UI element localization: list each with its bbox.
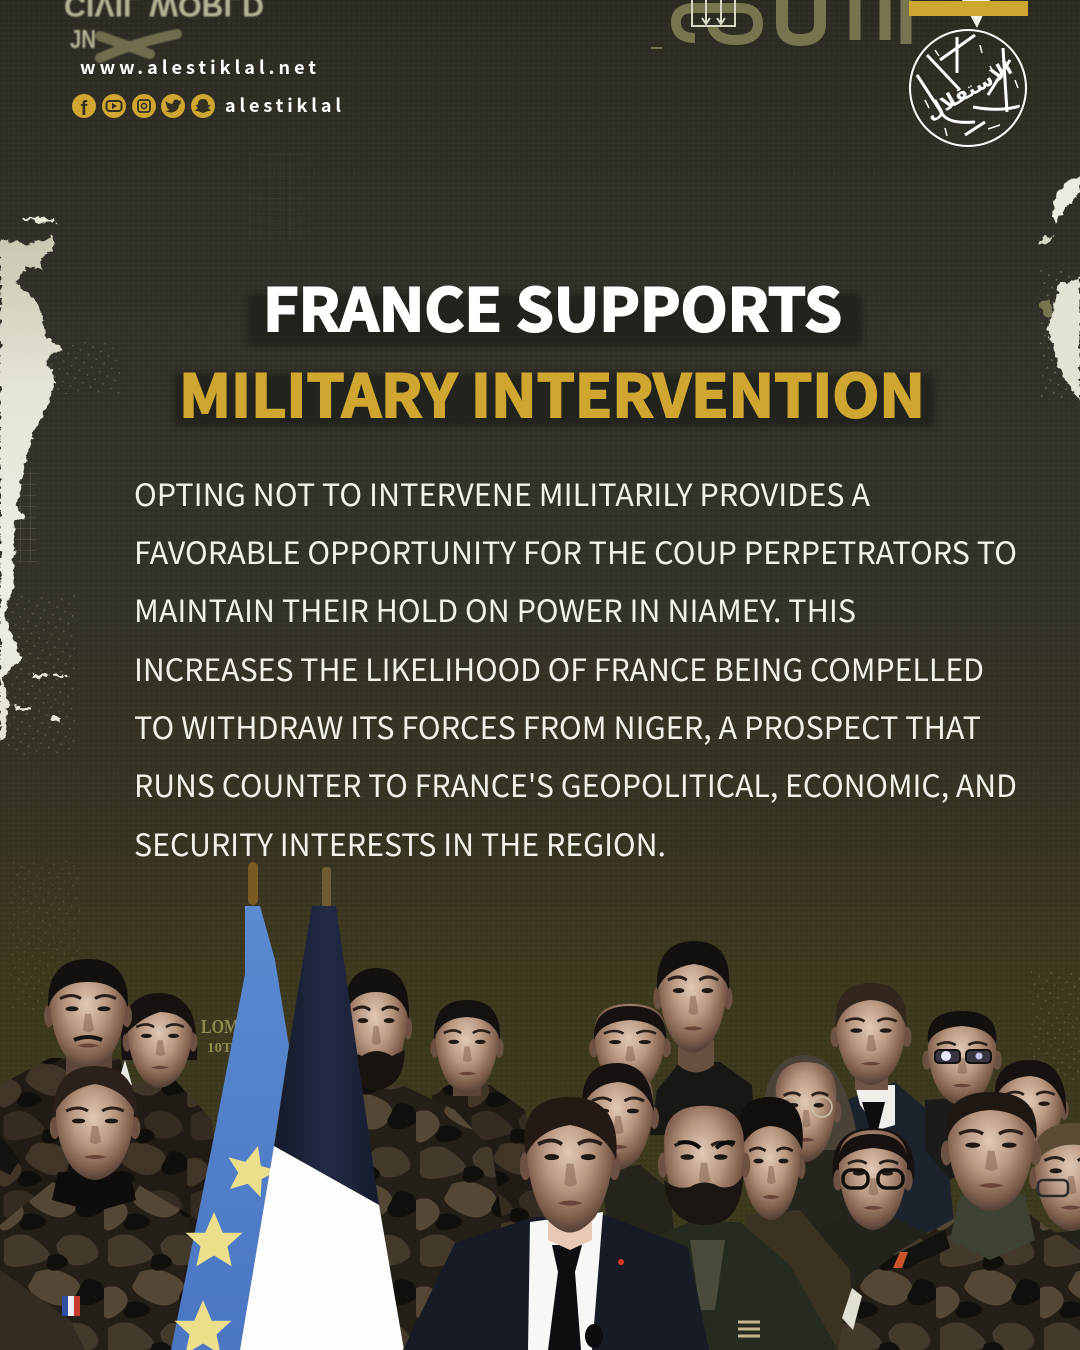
crowd: right group xyxy=(403,941,1080,1350)
logo seal xyxy=(910,30,1026,146)
badge xyxy=(842,1288,862,1330)
icon: french flag patch xyxy=(62,1296,80,1316)
star xyxy=(174,1300,232,1350)
suit jacket xyxy=(403,1215,709,1350)
body paragraph: RUNS COUNTER TO FRANCE'S GEOPOLITICAL, ECONOMIC, AND xyxy=(134,761,1017,806)
social handle: alestiklal xyxy=(225,92,341,118)
person: front-left female soldier xyxy=(0,1066,197,1350)
person: bald bearded man xyxy=(647,1106,838,1350)
person: woman with fringe xyxy=(100,993,216,1350)
icon: facebook xyxy=(72,94,96,120)
person: young man xyxy=(737,1097,855,1350)
icon: facebook: f xyxy=(81,98,88,120)
microphone xyxy=(585,1324,603,1348)
person: back woman left xyxy=(589,1004,671,1092)
background lettering behind flags: 10T xyxy=(207,1041,233,1056)
person: bearded soldier xyxy=(340,968,502,1350)
icon: small arrows box xyxy=(692,0,735,26)
person: moustached soldier xyxy=(0,959,140,1260)
body paragraph: TO WITHDRAW ITS FORCES FROM NIGER, A PROSPECT THAT xyxy=(134,703,981,748)
social icons row xyxy=(72,94,215,120)
icon: youtube xyxy=(102,94,126,118)
flag: European Union xyxy=(171,906,289,1350)
torn paper edge, right xyxy=(1038,177,1080,400)
title highlight: second line xyxy=(174,374,934,426)
logo top bar xyxy=(909,0,1028,28)
person: tall man in dark jacket xyxy=(650,941,755,1135)
person: man with reflective glasses xyxy=(922,1011,1002,1180)
title line two: MILITARY INTERVENTION xyxy=(179,349,925,434)
stencil background lettering, top left xyxy=(64,0,264,58)
icon: instagram xyxy=(132,94,156,118)
star xyxy=(186,1212,242,1266)
star xyxy=(221,1139,283,1200)
person: blonde woman in suit xyxy=(831,983,954,1245)
person: front-right female soldier xyxy=(838,1092,1080,1350)
stencil background lettering, top centre xyxy=(651,0,906,48)
logo seal: الاستقلال xyxy=(921,55,1016,124)
reflective glasses xyxy=(935,1050,991,1063)
title line one: FRANCE SUPPORTS xyxy=(263,263,842,348)
person: right back woman xyxy=(991,1060,1069,1157)
body paragraph: FAVORABLE OPPORTUNITY FOR THE COUP PERPETRATORS TO xyxy=(134,528,1017,573)
flag finial: EU xyxy=(248,862,258,905)
crowd: left group xyxy=(0,959,545,1350)
icon: snapchat xyxy=(191,94,215,118)
body paragraph: OPTING NOT TO INTERVENE MILITARILY PROVIDES A xyxy=(134,470,870,515)
background lettering behind flags xyxy=(201,1016,239,1056)
flags xyxy=(171,862,404,1350)
torn paper edge, left xyxy=(0,219,65,740)
chest rank stripes xyxy=(738,1322,760,1336)
body paragraph xyxy=(134,470,1017,865)
white shirt xyxy=(528,1212,603,1350)
dark glasses xyxy=(843,1170,903,1188)
body paragraph: MAINTAIN THEIR HOLD ON POWER IN NIAMEY. THIS xyxy=(134,586,856,631)
title highlight: first line xyxy=(248,294,862,346)
person: right-edge man with glasses xyxy=(1029,1123,1080,1350)
title xyxy=(174,263,934,434)
person: woman behind bearded soldier xyxy=(430,1000,545,1350)
stencil background lettering, top left: JN xyxy=(70,24,96,54)
flag finial: France xyxy=(322,867,331,907)
person: Macron xyxy=(403,1097,709,1350)
icon: twitter xyxy=(161,94,185,118)
lapel pin xyxy=(618,1259,624,1265)
person: woman with dark glasses xyxy=(800,1128,940,1350)
person: woman in front of tall man xyxy=(577,1063,675,1290)
black tie xyxy=(548,1245,582,1350)
flag: France xyxy=(240,906,404,1350)
body paragraph: SECURITY INTERESTS IN THE REGION. xyxy=(134,820,666,865)
body paragraph: INCREASES THE LIKELIHOOD OF FRANCE BEING COMPELLED xyxy=(134,645,984,690)
person: older woman with glasses xyxy=(761,1055,862,1240)
website url: www.alestiklal.net xyxy=(80,54,316,80)
background lettering behind flags: LOM xyxy=(201,1016,239,1038)
